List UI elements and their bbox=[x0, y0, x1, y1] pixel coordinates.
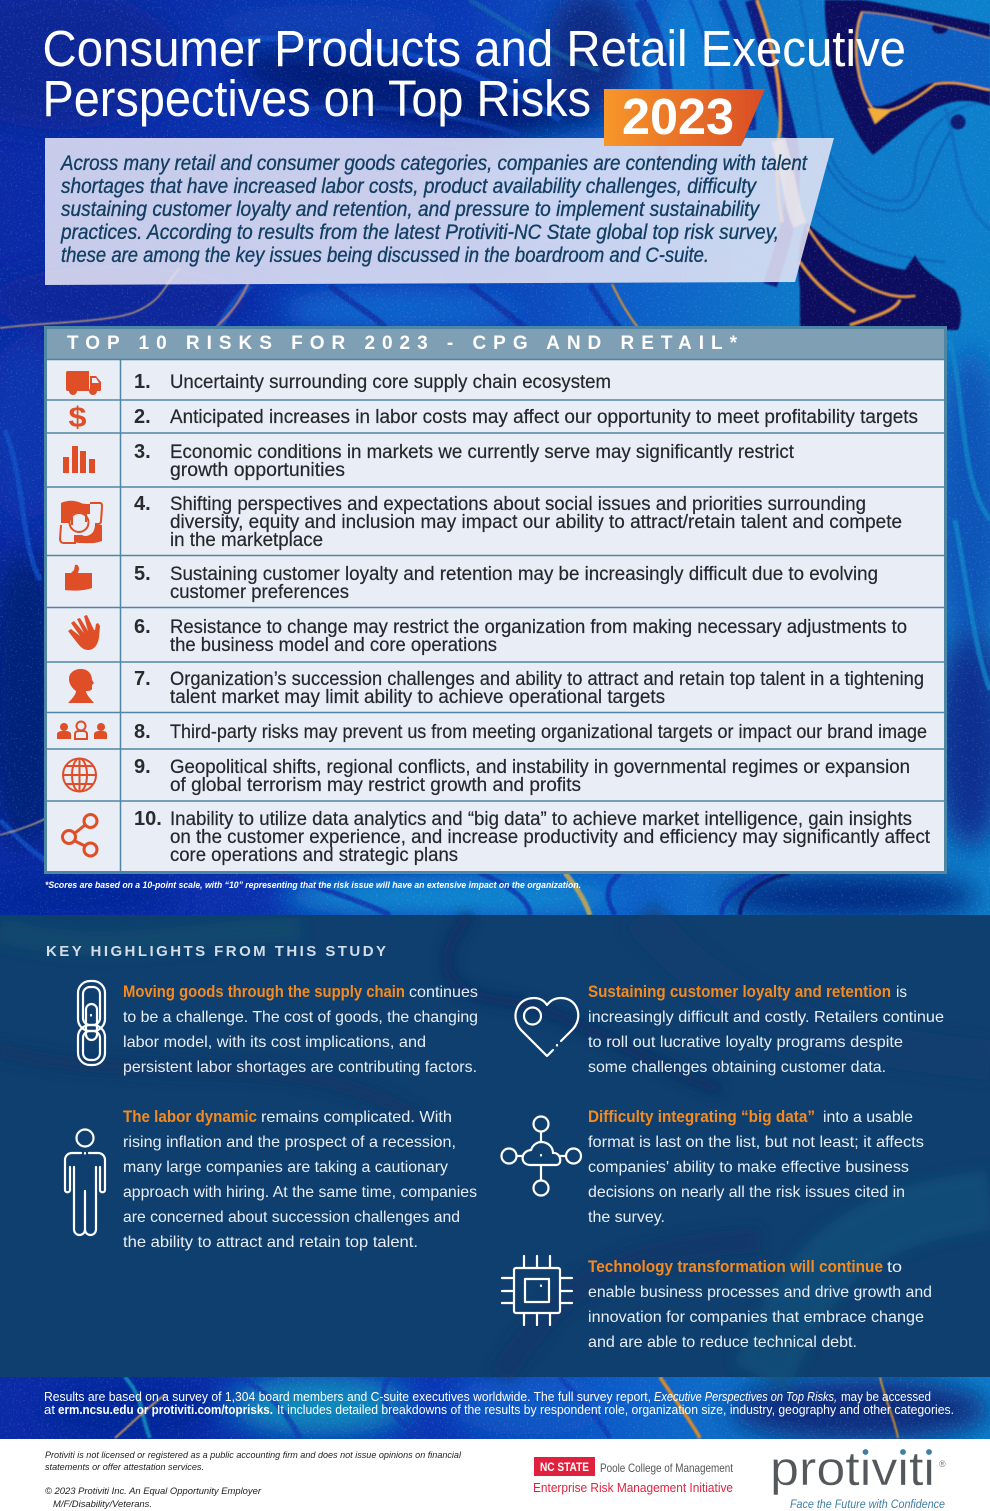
risk 3: Economic conditions in markets we currently serve may significantly restrict bbox=[170, 442, 795, 463]
icon: bar chart bbox=[63, 446, 95, 473]
risk 2: 2. bbox=[134, 406, 151, 428]
icon: share nodes bbox=[62, 814, 97, 856]
icon: heart bbox=[515, 998, 578, 1056]
survey note: at bbox=[44, 1403, 56, 1417]
risk 9: Geopolitical shifts, regional conflicts, and instability in governmental regimes or expansion bbox=[170, 757, 910, 778]
risk 5: 5. bbox=[134, 563, 151, 585]
risk 10 bbox=[62, 808, 931, 866]
highlight: big data: into a usable bbox=[823, 1109, 913, 1126]
highlight: supply chain: labor model, with its cost implications, and bbox=[123, 1034, 426, 1051]
risk 5 bbox=[65, 563, 878, 603]
risk 4 bbox=[60, 493, 902, 551]
footer bbox=[0, 1439, 990, 1511]
year badge 2023 bbox=[604, 88, 765, 146]
risk 7: Organization’s succession challenges and ability to attract and retain top talent in a tightening bbox=[170, 669, 924, 690]
table header bbox=[47, 329, 944, 359]
risk 4: 4. bbox=[134, 493, 151, 515]
highlight: customer loyalty: increasingly difficult and costly. Retailers continue bbox=[588, 1009, 944, 1026]
risk 3: growth opportunities bbox=[170, 460, 345, 481]
risk 9 bbox=[63, 756, 910, 796]
disclaimer: M/F/Disability/Veterans. bbox=[53, 1499, 152, 1510]
key highlights heading: KEY HIGHLIGHTS FROM THIS STUDY bbox=[46, 943, 386, 960]
risk 10: Inability to utilize data analytics and “big data” to achieve market intelligence, gain insights bbox=[170, 809, 912, 830]
icon: globe bbox=[63, 758, 96, 792]
highlight: labor dynamic: remains complicated. With bbox=[261, 1109, 452, 1126]
icon: chain bbox=[78, 981, 105, 1065]
icon: microchip bbox=[502, 1256, 572, 1325]
intro panel: sustaining customer loyalty and retention, and pressure to implement sustainability bbox=[61, 198, 760, 221]
highlight: labor dynamic: The labor dynamic bbox=[123, 1108, 257, 1126]
risk 2: Anticipated increases in labor costs may affect our opportunity to meet profitability targets bbox=[170, 407, 918, 428]
highlight: labor dynamic: rising inflation and the prospect of a recession, bbox=[123, 1134, 456, 1151]
risk 7 bbox=[68, 668, 924, 708]
risk 3: 3. bbox=[134, 441, 151, 463]
highlight: technology bbox=[502, 1256, 932, 1351]
icon: person bbox=[65, 1130, 105, 1235]
risk 4: diversity, equity and inclusion may impact our ability to attract/retain talent and compete bbox=[170, 512, 902, 533]
risk 7: talent market may limit ability to achieve operational targets bbox=[170, 687, 665, 708]
table footnote: *Scores are based on a 10-point scale, with “10” representing that the risk issue will have an extensive impact on the organization. bbox=[45, 880, 581, 891]
survey note: erm.ncsu.edu or protiviti.com/toprisks. bbox=[58, 1403, 273, 1417]
disclaimer bbox=[45, 1450, 462, 1510]
highlight: customer loyalty: some challenges obtaining customer data. bbox=[588, 1059, 886, 1076]
highlight: supply chain: to be a challenge. The cost of goods, the changing bbox=[123, 1009, 478, 1026]
highlight: big data bbox=[502, 1108, 924, 1226]
NC State logo: Poole College of Management bbox=[600, 1461, 734, 1475]
risk 10: core operations and strategic plans bbox=[170, 845, 458, 866]
disclaimer: Protiviti is not licensed or registered as a public accounting firm and does not issue opinions on financial bbox=[45, 1450, 462, 1461]
survey note bbox=[44, 1390, 954, 1417]
survey note: Executive Perspectives on Top Risks, bbox=[654, 1390, 837, 1404]
risk 1: Uncertainty surrounding core supply chain ecosystem bbox=[170, 372, 611, 393]
intro panel: shortages that have increased labor costs, product availability challenges, difficulty bbox=[61, 175, 757, 198]
Protiviti logo: ® bbox=[939, 1459, 946, 1469]
highlight: technology: and are able to reduce technical debt. bbox=[588, 1334, 857, 1351]
highlight: supply chain: Moving goods through the supply chain bbox=[123, 983, 405, 1001]
risk 6: the business model and core operations bbox=[170, 635, 497, 656]
highlight: supply chain bbox=[78, 981, 478, 1076]
right marble shapes bbox=[825, 0, 990, 155]
highlight: customer loyalty bbox=[515, 983, 944, 1076]
highlight: big data: format is last on the list, but not least; it affects bbox=[588, 1134, 924, 1151]
survey note: It includes detailed breakdowns of the results by respondent role, organization size, industry, geography and other categories. bbox=[277, 1403, 954, 1417]
risk 7: 7. bbox=[134, 668, 151, 690]
highlight: technology: enable business processes and drive growth and bbox=[588, 1284, 932, 1301]
title bbox=[42, 20, 906, 127]
survey note: Results are based on a survey of 1,304 board members and C-suite executives worldwide. The full survey report, bbox=[44, 1390, 651, 1404]
Protiviti logo bbox=[770, 1443, 946, 1511]
icon: three people bbox=[57, 722, 107, 739]
risk 8: 8. bbox=[134, 721, 151, 743]
disclaimer: statements or offer attestation services. bbox=[45, 1462, 204, 1473]
highlight: customer loyalty: Sustaining customer loyalty and retention bbox=[588, 983, 891, 1001]
risk 5: customer preferences bbox=[170, 582, 349, 603]
highlight: technology: Technology transformation will continue bbox=[588, 1258, 883, 1276]
risk 6 bbox=[68, 615, 907, 656]
risk 6: Resistance to change may restrict the organization from making necessary adjustments to bbox=[170, 617, 907, 638]
highlight: customer loyalty: to roll out lucrative loyalty programs despite bbox=[588, 1034, 903, 1051]
highlight: big data: companies' ability to make effective business bbox=[588, 1159, 909, 1176]
highlight: big data: Difficulty integrating “big data” bbox=[588, 1108, 815, 1126]
risk 10: on the customer experience, and increase productivity and efficiency may significantly affect bbox=[170, 827, 931, 848]
highlight: labor dynamic: many large companies are taking a cautionary bbox=[123, 1159, 448, 1176]
risk 1 bbox=[66, 371, 611, 395]
risk 3 bbox=[63, 441, 795, 481]
risk 9: of global terrorism may restrict growth and profits bbox=[170, 775, 581, 796]
Protiviti logo: protiviti bbox=[770, 1443, 935, 1496]
title: Perspectives on Top Risks bbox=[42, 70, 591, 127]
risk 8: Third-party risks may prevent us from meeting organizational targets or impact our brand image bbox=[170, 722, 927, 743]
table header: TOP 10 RISKS FOR 2023 - CPG AND RETAIL* bbox=[67, 333, 738, 354]
highlight: big data: the survey. bbox=[588, 1209, 665, 1226]
icon: raised hand bbox=[68, 615, 100, 650]
icon: thumbs up bbox=[65, 565, 92, 591]
panel: top 10 risks table bbox=[46, 328, 946, 872]
disclaimer: © 2023 Protiviti Inc. An Equal Opportunity Employer bbox=[45, 1486, 262, 1497]
Protiviti logo: Face the Future with Confidence bbox=[790, 1497, 945, 1511]
icon: dollar: $ bbox=[68, 402, 86, 434]
highlight: big data: decisions on nearly all the risk issues cited in bbox=[588, 1184, 905, 1201]
panel: key highlights background bbox=[0, 915, 990, 1377]
risk 4: in the marketplace bbox=[170, 530, 323, 551]
risk 9: 9. bbox=[134, 756, 151, 778]
intro panel: Across many retail and consumer goods categories, companies are contending with talent bbox=[59, 152, 808, 175]
survey note: may be accessed bbox=[841, 1390, 931, 1404]
highlight: labor dynamic bbox=[65, 1108, 477, 1251]
year badge 2023: 2023 bbox=[622, 88, 734, 145]
icon: head silhouette bbox=[68, 669, 94, 703]
highlight: technology: innovation for companies that embrace change bbox=[588, 1309, 924, 1326]
highlight: labor dynamic: are concerned about succession challenges and bbox=[123, 1209, 460, 1226]
title: Consumer Products and Retail Executive bbox=[42, 20, 906, 77]
risk 6: 6. bbox=[134, 616, 151, 638]
highlight: labor dynamic: approach with hiring. At the same time, companies bbox=[123, 1184, 477, 1201]
risk 1: 1. bbox=[134, 371, 151, 393]
highlight: supply chain: persistent labor shortages are contributing factors. bbox=[123, 1059, 477, 1076]
intro panel bbox=[45, 138, 834, 285]
gold veins bbox=[757, 0, 782, 222]
intro panel: these are among the key issues being discussed in the boardroom and C-suite. bbox=[61, 244, 709, 267]
highlight: labor dynamic: the ability to attract and retain top talent. bbox=[123, 1234, 418, 1251]
risk 10: 10. bbox=[134, 808, 162, 830]
risk 4: Shifting perspectives and expectations about social issues and priorities surrounding bbox=[170, 494, 866, 515]
highlight: supply chain: continues bbox=[409, 984, 478, 1001]
risk 5: Sustaining customer loyalty and retention may be increasingly difficult due to evolving bbox=[170, 564, 878, 585]
icon: cloud network bbox=[502, 1116, 581, 1196]
NC State logo: Enterprise Risk Management Initiative bbox=[533, 1480, 733, 1495]
NC State logo: NC STATE bbox=[540, 1460, 589, 1474]
intro panel: practices. According to results from the latest Protiviti-NC State global top risk survey, bbox=[60, 221, 779, 244]
icon: truck bbox=[66, 371, 101, 395]
NC State logo bbox=[533, 1457, 734, 1495]
icon: linked hands bbox=[60, 501, 102, 543]
risk 2 bbox=[68, 402, 918, 434]
highlight: technology: to bbox=[887, 1259, 902, 1276]
highlight: customer loyalty: is bbox=[896, 984, 907, 1001]
